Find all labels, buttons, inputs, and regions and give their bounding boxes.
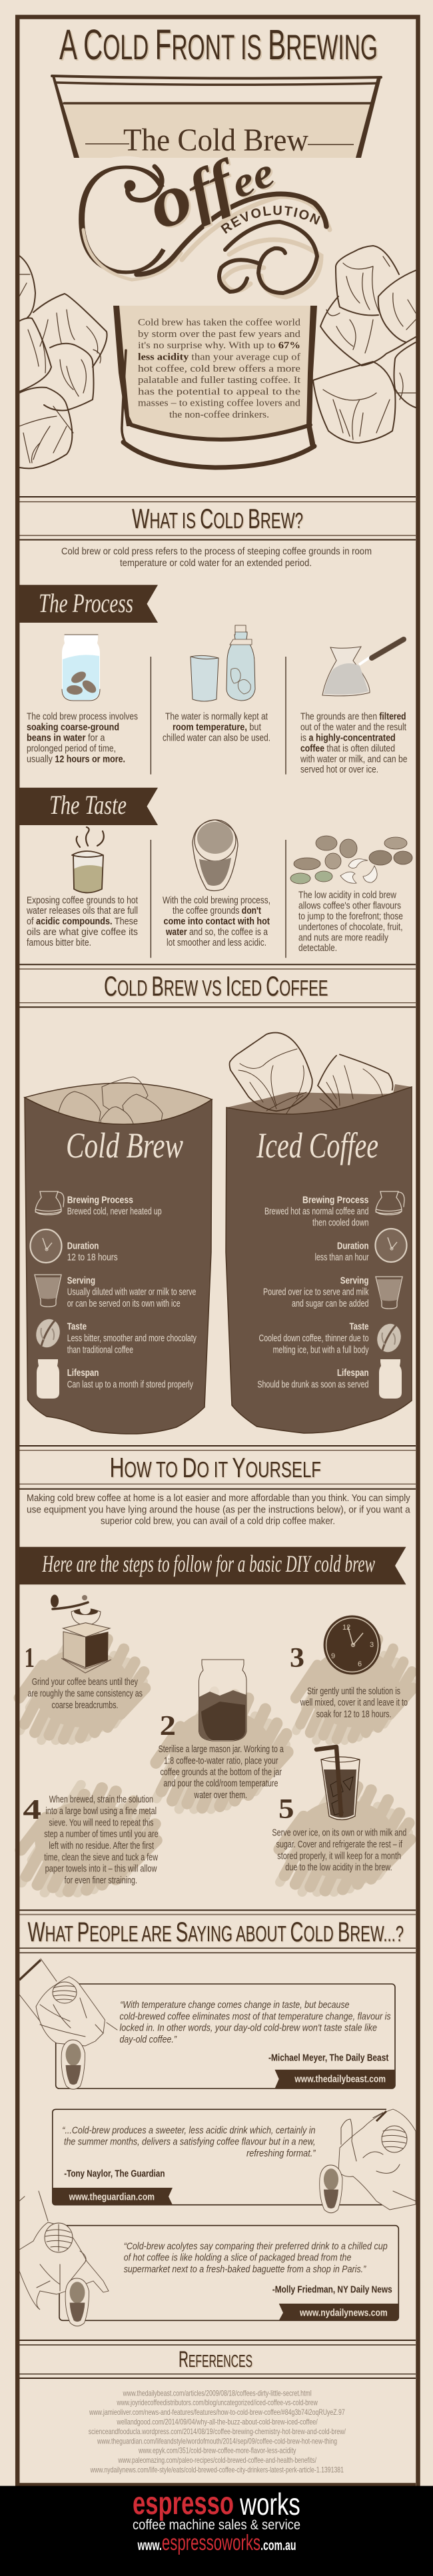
text: reference list: wellandgood.com/2014/09/04/why-all-the-buzz-about-cold-brew-iced-coffee/: [117, 2417, 318, 2426]
text: process steps: The water is normally kept at: [165, 712, 268, 723]
row: taste: Taste: [67, 1322, 87, 1333]
icon: coffee pot: [322, 639, 404, 696]
text: taste: Exposing coffee grounds to hot: [27, 895, 138, 906]
brush splash: [19, 1633, 145, 1740]
text: taste: detectable.: [298, 943, 337, 954]
number 2: 2: [160, 1711, 176, 1742]
text: step 2: Sterilise a large mason jar. Working to a: [159, 1744, 284, 1755]
row: serving: [263, 1276, 369, 1309]
text: intro paragraph: Cold brew has taken the coffee world: [138, 318, 301, 328]
text: process steps: is a highly-concentrated: [300, 733, 396, 743]
row: duration: 12 to 18 hours: [67, 1253, 118, 1263]
number 1: 1: [24, 1643, 35, 1674]
row: brewing process: Brewing Process: [302, 1195, 369, 1206]
row: duration: [67, 1241, 118, 1263]
row: duration: Duration: [337, 1241, 369, 1252]
text: reference list: www.thedailybeast.com/articles/2009/08/18/coffees-dirty-little-secret.html: [123, 2388, 312, 2398]
heading: REFERENCES: [179, 2347, 252, 2372]
text: quote: cold-brewed coffee eliminates most of that temperature change, flavour is: [120, 2011, 391, 2022]
text: DIY introduction: use equipment you have lying around the house (as per the instructions below), or if you want a: [27, 1504, 411, 1515]
row: lifespan: Should be drunk as soon as served: [257, 1379, 369, 1390]
text: step 4: When brewed, strain the solution: [49, 1795, 153, 1805]
text: step 1: Grind your coffee beans until they: [32, 1677, 139, 1688]
text: offee: offee: [135, 123, 283, 245]
source tag: [53, 2188, 173, 2205]
row: taste: [258, 1322, 369, 1355]
text: process steps: [27, 712, 408, 775]
panel: Cold Brew cup: [25, 1077, 212, 1434]
text: intro paragraph: has the potential to appeal to the: [138, 386, 300, 397]
text: process steps: The cold brew process involves: [27, 712, 138, 723]
step 2: [156, 1660, 288, 1809]
heading: COLD BREW VS ICED COFFEE: [104, 970, 328, 1002]
text: reference list: www.epyk.com/351/cold-brew-coffee-more-flavor-less-acidity: [138, 2446, 296, 2455]
text: process steps: prolonged period of time,: [27, 743, 116, 754]
text: taste: undertones of chocolate, fruit,: [298, 922, 402, 932]
row: lifespan: Can last up to a month if stored properly: [67, 1379, 194, 1390]
row: duration: less than an hour: [315, 1253, 369, 1263]
text: quote: [120, 2000, 391, 2045]
row: taste: Taste: [349, 1322, 369, 1333]
icon: clock: [324, 1616, 381, 1674]
quote panel: Tony Naylor: [53, 2109, 416, 2213]
text: taste: water and so, the coffee is a: [165, 927, 268, 938]
illustration: ice cubes right: [313, 246, 416, 443]
text: DIY introduction: [27, 1493, 411, 1527]
text: intro paragraph: [138, 318, 301, 420]
logo: espresso works: works: [239, 2487, 300, 2521]
icon: clock: [376, 1229, 406, 1262]
text: quote: “...Cold-brew produces a sweeter, less acidic drink which, certainly in: [62, 2125, 316, 2136]
icon: clock: 9: [331, 1652, 335, 1660]
text: taste: to jump to the forefront; those: [298, 911, 403, 922]
text: quote: [62, 2125, 316, 2159]
column dividers: process: [151, 657, 286, 775]
number 5: 5: [278, 1794, 294, 1825]
illustration: ice cubes left: [19, 256, 107, 468]
text: step 2: [159, 1744, 284, 1801]
heading: WHAT IS COLD BREW?: [132, 503, 303, 534]
source tag: www.theguardian.com: [69, 2192, 155, 2202]
heading: The Cold Brew: The Cold Brew: [123, 123, 308, 158]
row: taste: Cooled down coffee, thinner due to: [258, 1333, 369, 1344]
text: process steps: out of the water and the result: [300, 723, 406, 733]
row: brewing process: Brewed hot as normal coffee and: [264, 1206, 369, 1217]
icon: clock: 3: [370, 1641, 374, 1649]
text: taste: allows coffee's other flavours: [298, 901, 401, 912]
text: quote: refreshing format.”: [246, 2148, 316, 2159]
icon: coffee from above: [193, 820, 238, 891]
icon: coffee bean: [374, 1321, 404, 1355]
logo: Coffee Revolution: [67, 123, 332, 312]
row: brewing process: [67, 1195, 162, 1217]
text: quote: of hot coffee is like holding a slice of packaged bread from the: [124, 2253, 351, 2264]
number 4: 4: [23, 1795, 41, 1825]
footer: [0, 2486, 433, 2576]
text: process steps: usually 12 hours or more.: [27, 754, 125, 765]
text: intro paragraph: the non-coffee drinkers.: [169, 410, 269, 420]
text: step 4: into a large bowl using a fine metal: [45, 1806, 157, 1817]
text: step 1: are roughly the same consistency as: [28, 1688, 143, 1699]
text: step 3: [300, 1686, 408, 1720]
brush splash: [156, 1692, 288, 1809]
text: process steps: beans in water for a: [27, 733, 105, 743]
text: step 2: 1:8 coffee-to-water ratio, place your: [164, 1756, 278, 1766]
row: lifespan: [67, 1368, 194, 1390]
text: step 4: time, clean the sieve and tuck a few: [44, 1852, 158, 1863]
text: reference list: www.paleomazing.com/paleo-recipes/cold-brewed-coffee-and-health-benefits/: [118, 2455, 316, 2465]
banner: The Taste: The Taste: [49, 790, 127, 820]
icon: nuts: [290, 836, 412, 884]
text: taste: oils are what give coffee its: [27, 927, 138, 938]
banner: The Process: [19, 585, 158, 623]
text: step 1: [28, 1677, 143, 1711]
source tag: www.nydailynews.com: [299, 2308, 388, 2319]
text: step 4: paper towels into it – this will allow: [45, 1864, 157, 1875]
row: brewing process: then cooled down: [312, 1218, 369, 1229]
step 5: [272, 1747, 410, 1892]
text: attribution: -Molly Friedman, NY Daily News: [272, 2285, 392, 2296]
row: brewing process: [264, 1195, 369, 1229]
banner: The Taste: [19, 788, 158, 825]
text: step 1: coarse breadcrumbs.: [52, 1700, 119, 1711]
text: reference list: www.joyridecoffeedistributors.com/blog/uncategorized/iced-coffee-vs-cold-brew: [117, 2398, 318, 2408]
icon: coffee from above: [65, 2278, 89, 2326]
row: duration: Duration: [67, 1241, 99, 1252]
text: intro paragraph: palatable and fuller tasting coffee. It: [138, 375, 300, 386]
step 3: [290, 1616, 413, 1740]
text: step 5: due to the low acidity in the brew.: [285, 1863, 392, 1873]
text: step 3: soak for 12 to 18 hours.: [316, 1709, 392, 1720]
text: step 4: left with no residue. After the first: [49, 1841, 154, 1851]
row: lifespan: Lifespan: [337, 1368, 369, 1379]
text: reference list: www.jamieoliver.com/news-and-features/features/how-to-cold-brew-coffee/#84g3b74i2oqRUyeZ.97: [89, 2408, 345, 2417]
flourish: [137, 194, 326, 274]
brush splash: [296, 1633, 413, 1740]
row: brewing process: Brewing Process: [67, 1195, 133, 1206]
illustration: cup top with The Cold Brew: [52, 76, 381, 158]
text: quote: “Cold-brew acolytes say comparing their preferred drink to a chilled cup: [124, 2241, 388, 2252]
source tag: www.thedailybeast.com: [294, 2075, 386, 2085]
illustration: person with coffee: [19, 2191, 109, 2326]
text: Revolution: [225, 215, 320, 234]
text: DIY introduction: superior cold brew, you can avail of a cold drip coffee maker.: [101, 1516, 335, 1527]
text: step 2: coffee grounds at the bottom of the jar: [160, 1767, 282, 1777]
text: process steps: coffee that is often diluted: [300, 743, 395, 754]
icon: steaming cup: [72, 827, 104, 892]
icon: clock: 6: [358, 1660, 362, 1668]
icon: clock: [31, 1229, 61, 1263]
quote panel: Michael Meyer: [19, 1959, 395, 2089]
text: process steps: The grounds are then filtered: [300, 712, 406, 723]
heading: Iced Coffee: Iced Coffee: [256, 1126, 378, 1165]
icon: coffee pot: [35, 1191, 64, 1215]
icon: coffee from above: [61, 2040, 85, 2089]
row: brewing process: Brewed cold, never heated up: [67, 1206, 162, 1217]
text: taste: lot smoother and less acidic.: [167, 938, 266, 948]
icon: jar: [37, 1359, 59, 1399]
row: serving: Usually diluted with water or milk to serve: [67, 1287, 196, 1298]
row: serving: or can be served on its own with ice: [67, 1299, 181, 1309]
icon: coffee pot: [376, 1191, 404, 1215]
text: intro paragraph: it's no surprise why. With up to 67%: [138, 340, 300, 351]
row: lifespan: Lifespan: [67, 1368, 99, 1379]
text: taste: the coffee grounds don't: [173, 906, 261, 916]
text: reference list: www.nydailynews.com/life-style/eats/cold-brewed-coffee-city-drinkers-latest-perk-article-1.1391381: [90, 2465, 344, 2475]
logo: Coffee Revolution: REVOLUTION: [220, 205, 320, 234]
text: definition: [61, 547, 372, 569]
source tag: [274, 2070, 395, 2089]
quote panel: Molly Friedman: [19, 2191, 398, 2326]
logo: espresso works: espresso: [133, 2486, 234, 2521]
row: serving: Serving: [340, 1276, 369, 1287]
text: quote: supermarket next to a fresh-baked baguette from a shop in Paris.”: [124, 2264, 366, 2275]
main title: A COLD FRONT IS BREWING: [59, 21, 378, 69]
row: lifespan: [257, 1368, 369, 1390]
text: step 2: and pour the cold/room temperature: [163, 1779, 278, 1789]
row: serving: and sugar can be added: [292, 1299, 369, 1309]
icon: glass and bottle of water: [191, 625, 255, 701]
text: taste: and nuts are more readily: [298, 932, 389, 943]
text: intro paragraph: less acidity than your average cup of: [138, 352, 300, 362]
text: taste: With the cold brewing process,: [163, 895, 270, 906]
icon: mason jar with grounds: [199, 1660, 246, 1741]
number 3: 3: [290, 1643, 304, 1674]
row: serving: [67, 1276, 196, 1309]
brush splash: [279, 1783, 410, 1892]
heading: HOW TO DO IT YOURSELF: [110, 1452, 321, 1483]
icon: coffee bean: [33, 1317, 63, 1350]
text: step 2: water over them.: [194, 1790, 247, 1801]
illustration: cup bottom with intro text: [113, 306, 317, 468]
row: taste: melting ice, but with a full body: [273, 1345, 369, 1355]
text: definition: temperature or cold water for an extended period.: [120, 558, 312, 569]
panel: Iced Coffee cup: [226, 1033, 412, 1433]
row: serving: Serving: [67, 1276, 95, 1287]
text: quote: locked in. In other words, your day-old cold-brew won't taste stale like: [120, 2023, 377, 2034]
heading: Cold Brew: Cold Brew: [66, 1126, 183, 1165]
text: quote: “With temperature change comes change in taste, but because: [120, 2000, 350, 2011]
text: step 4: for even finer straining.: [65, 1875, 137, 1886]
text: reference list: www.theguardian.com/lifeandstyle/wordofmouth/2014/sep/09/coffee-cold-brew-hot-new-thing: [97, 2436, 337, 2445]
icon: jar: [379, 1359, 402, 1399]
text: definition: Cold brew or cold press refers to the process of steeping coffee grounds in room: [61, 547, 372, 557]
text: intro paragraph: by storm over the past few years and: [138, 329, 301, 340]
icon: glass: [376, 1277, 402, 1309]
text: reference list: [89, 2388, 346, 2475]
text: quote: day-old coffee.”: [120, 2035, 177, 2045]
banner: The Process: The Process: [39, 588, 133, 618]
text: intro paragraph: masses – to existing coffee lovers and: [138, 398, 301, 409]
text: step 4: sieve. You will need to repeat this: [49, 1817, 154, 1828]
text: step 4: step a number of times until you are: [44, 1829, 159, 1840]
text: quote: the summer months, delivers a satisfying coffee flavour but in a new,: [64, 2137, 316, 2148]
icon: clock: 12: [342, 1624, 350, 1632]
text: website: www.espressoworks.com.au: [137, 2530, 296, 2555]
text: taste: [26, 890, 403, 954]
banner: DIY steps: [19, 1547, 406, 1584]
illustration: person with coffee: [320, 2109, 416, 2213]
text: taste: famous bitter bite.: [27, 938, 91, 948]
icon: iced coffee glass: [316, 1747, 360, 1819]
text: step 4: [44, 1795, 159, 1886]
source tag: [279, 2304, 398, 2320]
row: taste: [67, 1322, 197, 1355]
step 1: [19, 1594, 145, 1740]
icon: coffee from above: [320, 2165, 342, 2213]
text: process steps: with water or milk, and can be: [300, 754, 408, 765]
text: step 3: Stir gently until the solution is: [307, 1686, 400, 1697]
logo: espresso works: [133, 2486, 300, 2533]
heading: WHAT PEOPLE ARE SAYING ABOUT COLD BREW...?: [28, 1916, 404, 1947]
text: process steps: chilled water can also be used.: [163, 733, 270, 743]
text: attribution: -Michael Meyer, The Daily Beast: [268, 2053, 388, 2063]
text: attribution: -Tony Naylor, The Guardian: [64, 2168, 165, 2179]
text: taste: of acidic compounds. These: [27, 916, 138, 927]
illustration: person with coffee: [19, 1959, 117, 2089]
text: process steps: room temperature, but: [173, 723, 261, 733]
text: step 5: [272, 1828, 406, 1873]
icon: glass: [35, 1275, 61, 1307]
text: intro paragraph: hot coffee, cold brew offers a more: [138, 364, 300, 374]
text: process steps: served hot or over ice.: [300, 765, 378, 775]
row: taste: than traditional coffee: [67, 1345, 133, 1355]
logo: espresso works: coffee machine sales & service: [133, 2517, 300, 2533]
row: serving: Poured over ice to serve and milk: [263, 1287, 369, 1298]
brush splash: [21, 1785, 157, 1893]
big letter C of Coffee: C: [67, 127, 177, 312]
icon: coffee grinder: [51, 1594, 111, 1673]
text: quote: [124, 2241, 388, 2275]
row: duration: [315, 1241, 369, 1263]
column dividers: taste: [151, 840, 286, 958]
step 4: [21, 1785, 159, 1893]
text: taste: The low acidity in cold brew: [298, 890, 396, 901]
text: taste: come into contact with hot: [164, 916, 270, 927]
text: process steps: soaking coarse-ground: [27, 723, 119, 733]
text: taste: water releases oils that are full: [26, 906, 138, 916]
text: reference list: scienceandfooducla.wordpress.com/2014/08/19/coffee-brewing-chemistry-hot-brew-and-cold-brew/: [89, 2427, 346, 2436]
row: taste: Less bitter, smoother and more chocolaty: [67, 1333, 197, 1344]
icon: jar with beans: [62, 635, 100, 701]
